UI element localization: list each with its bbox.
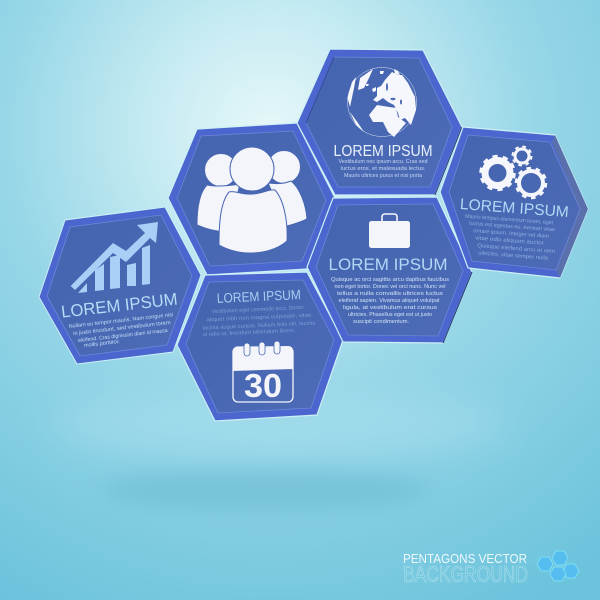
panel: people hexagon: [168, 123, 336, 275]
panel: chart hexagon: [39, 207, 201, 364]
text block: aliquet nibh non magna vulputate, vitae: [206, 313, 312, 323]
text block: Nullam eu tempor mauris. Nam congue nisi: [68, 312, 173, 330]
heading: LOREM IPSUM: [334, 143, 432, 160]
text block: Mauris tempus elementum lorem, eget: [465, 214, 554, 226]
heading: LOREM IPSUM: [328, 255, 448, 274]
text block: [338, 159, 428, 179]
icon: small hexagons logo: [537, 551, 579, 581]
text block: Mauris ultrices purus et nisi porta: [344, 173, 422, 179]
panel: gears hexagon: [440, 127, 588, 278]
text block: non eget tortor. Donec vel orci nunc. Nunc vel: [334, 284, 446, 290]
text block: [68, 312, 173, 349]
heading: LOREM IPSUM: [216, 287, 301, 306]
text block: vitae odio aliquam auctor.: [475, 235, 545, 247]
text block: ligula, at vestibulum erat cursus: [343, 305, 437, 311]
icon: group of people: [197, 147, 307, 253]
icon: calendar: [233, 341, 293, 404]
icon: globe: [348, 68, 416, 137]
text block: in justo tincidunt, sed vestibulum lorem: [73, 320, 171, 337]
heading: LOREM IPSUM: [459, 196, 569, 221]
panel: calendar hexagon: [177, 272, 343, 421]
text block: ultricies. Phasellus eget est ut justo: [348, 312, 432, 318]
light band under hexagons: [50, 391, 510, 459]
text block: luctus eros, et malesuada lectus.: [340, 166, 426, 172]
icon: calendar: 30: [244, 367, 282, 404]
text block: [202, 305, 316, 338]
text block: ultricies, vitae semper nulla: [478, 250, 548, 262]
heading: LOREM IPSUM: [60, 289, 179, 322]
icon: gears: [481, 146, 546, 198]
text block: ornare ipsum. Integer vel diam: [473, 228, 550, 240]
panel: globe hexagon: [297, 49, 462, 195]
text block: [465, 214, 556, 262]
text block: luctus est egestas eu. Aenean vitae: [469, 221, 555, 233]
icon: briefcase: [369, 214, 410, 248]
text block: Vestibulum eget commodo arcu. Donec: [212, 305, 304, 315]
text block: tellus a nulla convallis ultrices luctus: [337, 291, 443, 297]
floor shadow: [100, 470, 430, 510]
text block: ut odio ut, tincidunt bibendum libero.: [202, 328, 296, 338]
text block: mollis porttitor.: [84, 339, 120, 349]
text block: eleifend sapien. Vivamus aliquet volutpat: [338, 298, 440, 304]
text block: suscipit condimentum.: [353, 319, 409, 325]
footer caption: BACKGROUND: [403, 561, 528, 587]
text block: Quisque ac orci sagittis arcu dapibus faucibus: [331, 277, 449, 283]
text block: Quisque eleifend arcu et sem: [477, 243, 556, 255]
footer caption: [403, 551, 528, 587]
panel: briefcase hexagon: [307, 197, 472, 343]
icon: growth chart: [71, 222, 158, 293]
text block: Vestibulum nec ipsum arcu. Cras sed: [338, 159, 428, 165]
text block: lacinia augue cursus. Nullam felis elit, lacinia: [202, 320, 316, 332]
text block: [331, 277, 449, 325]
footer caption: PENTAGONS VECTOR: [403, 551, 527, 566]
text block: eleifend. Cras dignissim diam id massa: [78, 328, 168, 344]
